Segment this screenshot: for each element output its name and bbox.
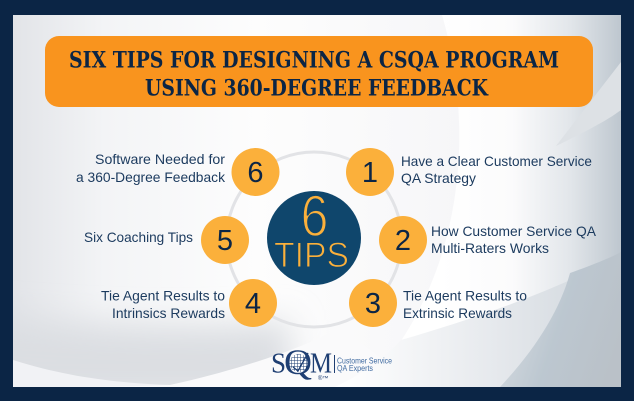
logo: SQM: S xyxy=(271,348,286,380)
tip 6: a 360-Degree Feedback xyxy=(76,169,226,185)
tip 1: Have a Clear Customer Service xyxy=(401,153,592,169)
tip 4: 4 xyxy=(245,288,261,320)
logo: SQM: Customer Service xyxy=(337,356,392,366)
tip 4 xyxy=(101,279,277,327)
title xyxy=(69,47,559,102)
ring connecting tips xyxy=(226,152,402,327)
logo: SQM: ®™ xyxy=(318,375,328,382)
tip 2 xyxy=(379,216,597,264)
logo: SQM: Q xyxy=(284,342,312,382)
tip 4: Intrinsics Rewards xyxy=(112,305,225,321)
tip 3 xyxy=(349,279,527,327)
center badge: 6 tips: 6 xyxy=(300,184,328,249)
tip 3: Extrinsic Rewards xyxy=(403,305,512,321)
logo: SQM: QA Experts xyxy=(337,364,373,373)
tip 5 xyxy=(84,216,249,264)
tip 5: 5 xyxy=(217,225,233,257)
tip 2: How Customer Service QA xyxy=(431,223,597,239)
logo: SQM: M xyxy=(310,348,332,380)
tip 6 xyxy=(76,148,280,196)
center badge: 6 tips: TIPS xyxy=(274,236,349,275)
title banner xyxy=(45,36,593,107)
tip 4: Tie Agent Results to xyxy=(101,288,225,304)
tip 2: Multi-Raters Works xyxy=(431,240,549,256)
tip 6: Software Needed for xyxy=(95,151,225,167)
tip 1 xyxy=(346,148,592,196)
center badge: 6 tips xyxy=(267,184,361,285)
tip 1: QA Strategy xyxy=(401,170,476,186)
tip 6: 6 xyxy=(247,157,264,189)
tip 3: Tie Agent Results to xyxy=(403,288,527,304)
tip 1: 1 xyxy=(362,157,378,189)
tip 5: Six Coaching Tips xyxy=(84,229,193,245)
tip 3: 3 xyxy=(365,288,381,320)
logo: SQM xyxy=(271,342,392,382)
title: USING 360-DEGREE FEEDBACK xyxy=(145,76,489,102)
tip 2: 2 xyxy=(395,225,411,257)
